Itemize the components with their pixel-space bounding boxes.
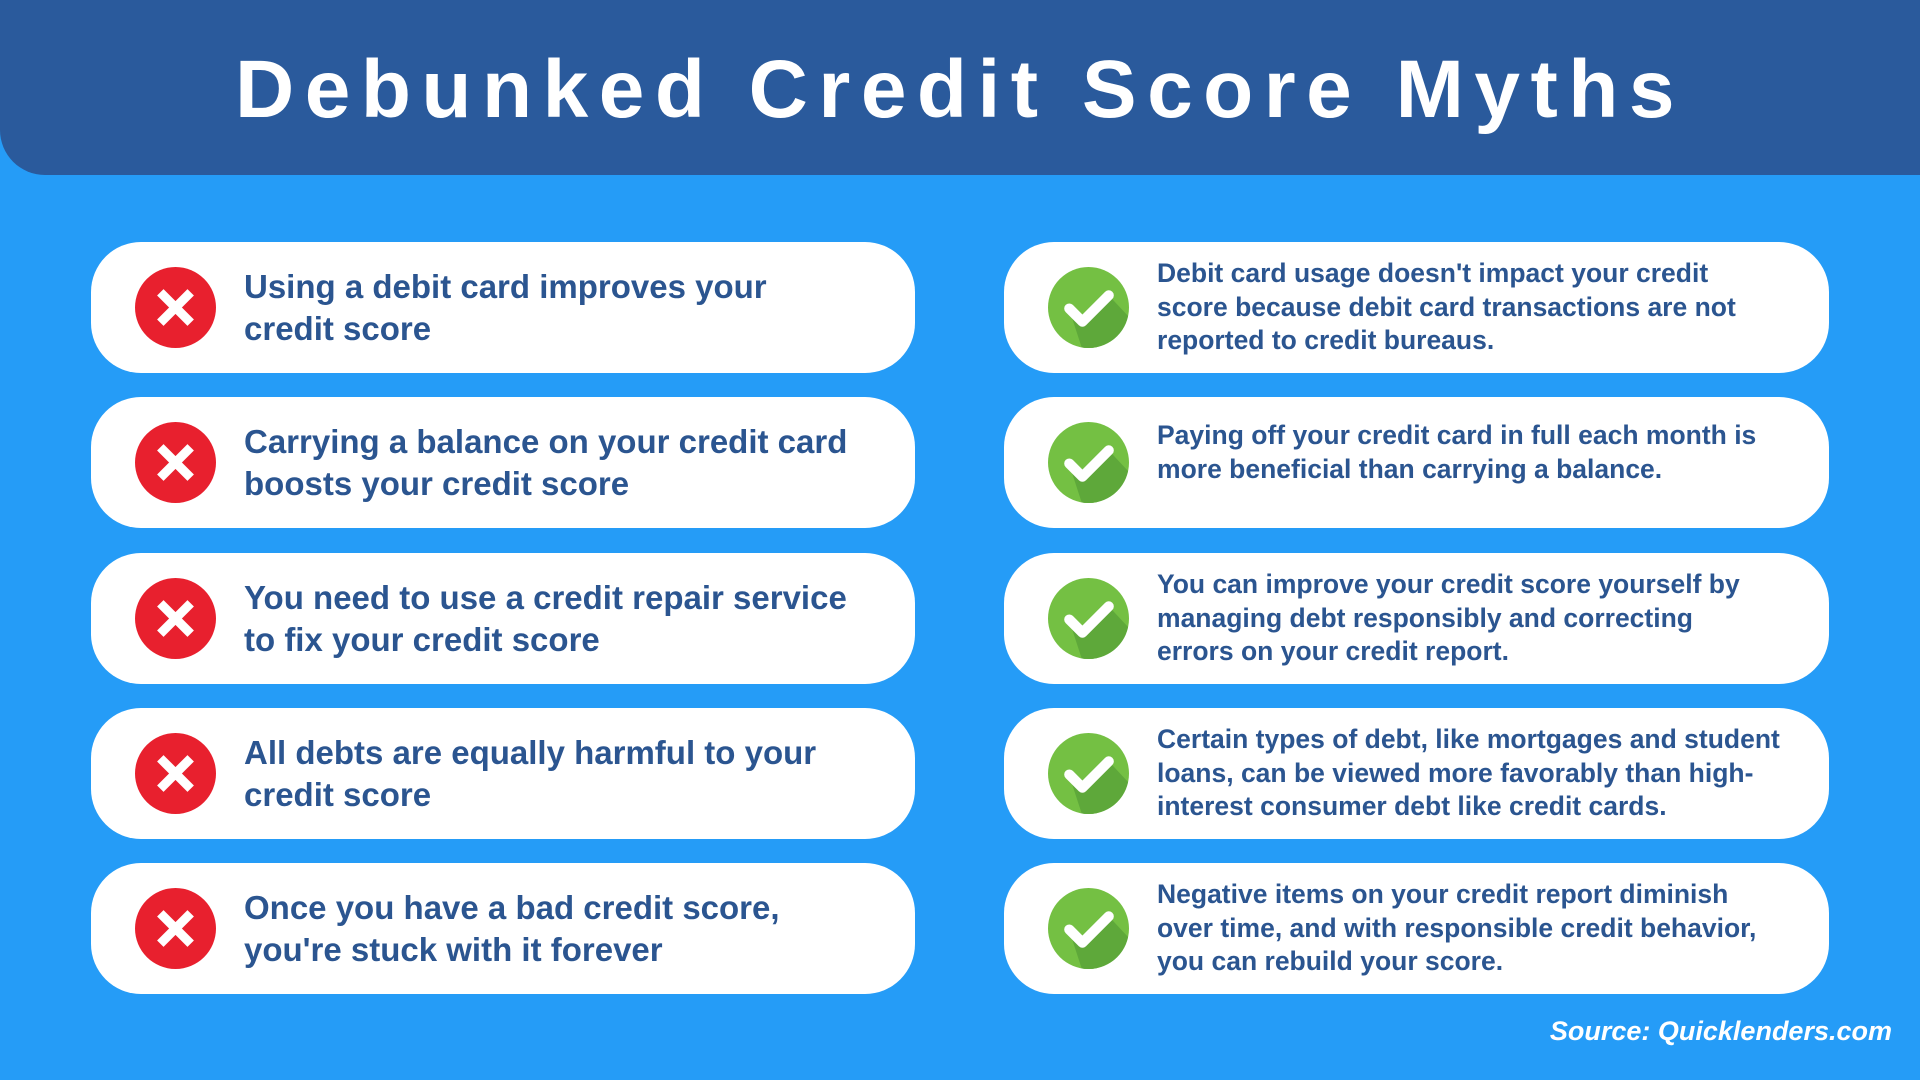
myth card 1: [91, 242, 915, 373]
fact text: [1157, 724, 1780, 821]
fact text: managing debt responsibly and correcting: [1157, 603, 1693, 633]
fact text: you can rebuild your score.: [1157, 946, 1503, 976]
myth text: [244, 422, 847, 502]
myth text: credit score: [244, 310, 431, 346]
fact text: score because debit card transactions are not: [1157, 292, 1736, 322]
fact text: interest consumer debt like credit cards.: [1157, 791, 1667, 821]
myth text: You need to use a credit repair service: [244, 578, 847, 616]
icon: green check: [1048, 267, 1129, 348]
fact card 1: [1004, 242, 1829, 373]
myth text: to fix your credit score: [244, 620, 600, 658]
fact text: loans, can be viewed more favorably than high-: [1157, 758, 1753, 788]
myth text: [244, 578, 847, 658]
myth text: All debts are equally harmful to your: [244, 734, 816, 770]
icon: green check: [1048, 578, 1129, 659]
fact text: Paying off your credit card in full each month is: [1157, 420, 1756, 450]
header banner: [0, 0, 1920, 175]
fact text: over time, and with responsible credit behavior,: [1157, 913, 1756, 943]
fact text: You can improve your credit score yourself by: [1157, 569, 1740, 599]
icon: red x: [135, 422, 216, 503]
myth text: boosts your credit score: [244, 464, 629, 502]
myth text: [244, 888, 780, 968]
fact text: [1157, 420, 1756, 484]
fact text: [1157, 879, 1756, 976]
fact text: [1157, 569, 1740, 666]
myth card 4: [91, 708, 915, 839]
myth card 3: [91, 553, 915, 684]
fact card 3: [1004, 553, 1829, 684]
icon: green check: [1048, 888, 1129, 969]
myth text: Using a debit card improves your: [244, 268, 767, 304]
icon: red x: [135, 267, 216, 348]
fact card 4: [1004, 708, 1829, 839]
myth text: [244, 268, 767, 346]
myth text: credit score: [244, 776, 431, 812]
fact card 2: [1004, 397, 1829, 528]
icon: green check: [1048, 422, 1129, 503]
fact text: errors on your credit report.: [1157, 636, 1509, 666]
fact text: Certain types of debt, like mortgages and student: [1157, 724, 1780, 754]
icon: red x: [135, 733, 216, 814]
source note: Source: Quicklenders.com: [1550, 1016, 1892, 1046]
myth card 2: [91, 397, 915, 528]
icon: green check: [1048, 733, 1129, 814]
fact text: reported to credit bureaus.: [1157, 325, 1494, 355]
icon: red x: [135, 578, 216, 659]
fact card 5: [1004, 863, 1829, 994]
myth text: you're stuck with it forever: [244, 930, 663, 968]
icon: red x: [135, 888, 216, 969]
fact text: Debit card usage doesn't impact your credit: [1157, 258, 1708, 288]
fact text: Negative items on your credit report diminish: [1157, 879, 1728, 909]
myth text: Carrying a balance on your credit card: [244, 422, 847, 460]
myth text: [244, 734, 816, 812]
fact text: [1157, 258, 1736, 355]
title: Debunked Credit Score Myths: [235, 44, 1685, 135]
myth text: Once you have a bad credit score,: [244, 888, 780, 926]
myth card 5: [91, 863, 915, 994]
fact text: more beneficial than carrying a balance.: [1157, 454, 1662, 484]
